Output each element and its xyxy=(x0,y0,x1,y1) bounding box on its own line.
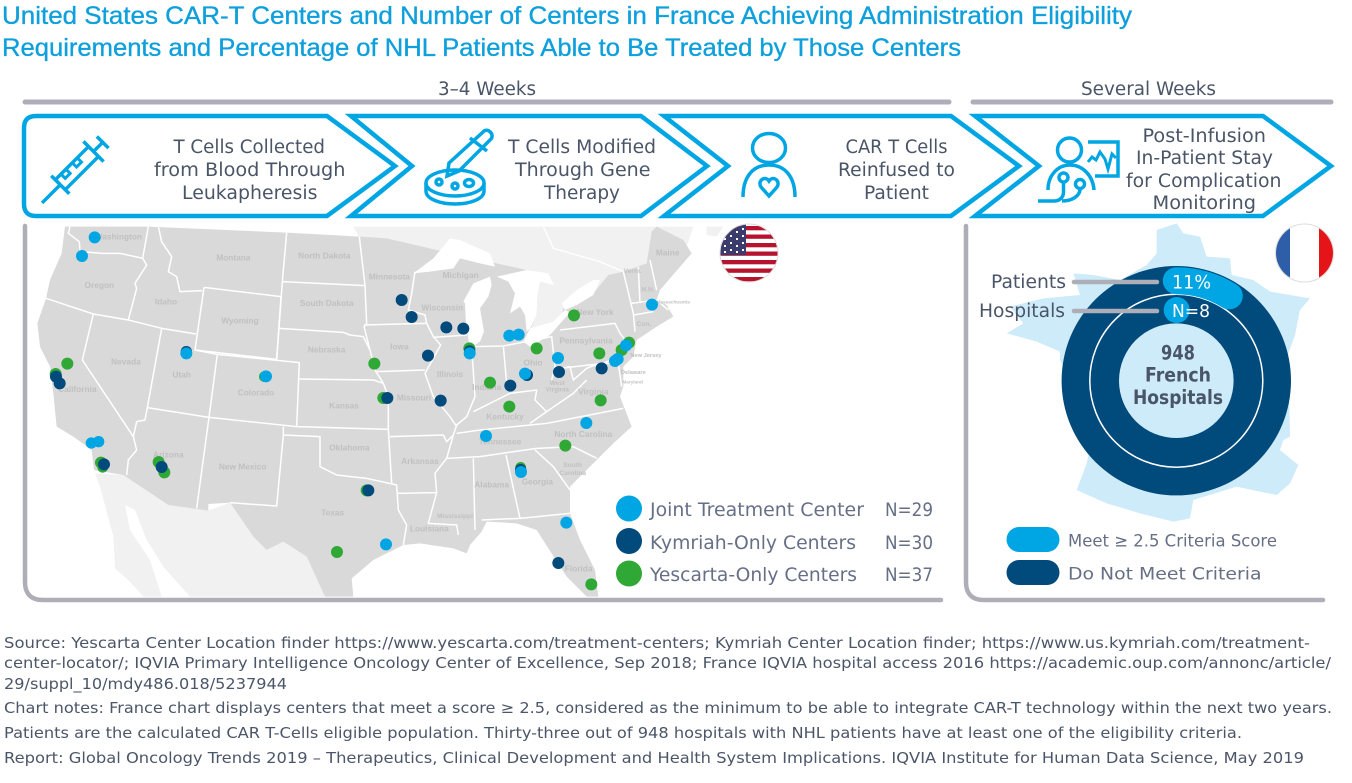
step 1 text: T Cells Collected xyxy=(173,137,325,158)
step 1 text: Leukapheresis xyxy=(182,183,318,204)
state labels: West xyxy=(550,380,566,387)
hospitals segment: N=8: N=8 xyxy=(1172,301,1210,322)
state labels: Ohio xyxy=(524,357,542,367)
step 1 text xyxy=(154,137,346,204)
source and chart notes: Source: Yescarta Center Location finder https://www.yescarta.com/treatment-centers; Kymriah Center Location finder; https://www.us.kymriah.com/treatment- xyxy=(4,634,1310,652)
step 4 text: Post-Infusion xyxy=(1142,126,1266,147)
state labels: Verm. xyxy=(624,268,642,275)
step 4 text: Monitoring xyxy=(1152,193,1256,214)
state labels: North Dakota xyxy=(298,250,351,260)
state labels: Minnesota xyxy=(369,272,410,282)
title: Requirements and Percentage of NHL Patients Able to Be Treated by Those Centers xyxy=(2,34,961,62)
center label: 948 xyxy=(1161,342,1195,364)
state labels: Carolina xyxy=(559,470,586,477)
legend: US centers: Joint Treatment Center xyxy=(649,499,864,521)
legend: US centers: Yescarta-Only Centers xyxy=(649,564,857,586)
center dots xyxy=(50,231,658,590)
center label: French xyxy=(1145,364,1211,386)
state labels: Mississippi xyxy=(437,513,473,520)
step 3 text: CAR T Cells xyxy=(846,137,948,158)
callout: patients: Patients xyxy=(991,272,1066,293)
legend: US centers xyxy=(616,496,933,586)
step 3 text: Patient xyxy=(864,183,929,204)
state labels: Arkansas xyxy=(401,456,439,466)
source and chart notes xyxy=(4,634,1332,767)
Kymriah-only dots xyxy=(50,294,608,569)
step 2 text xyxy=(507,137,656,204)
legend: US centers: Kymriah-Only Centers xyxy=(650,532,856,554)
state labels: South xyxy=(563,462,582,469)
state labels: North Carolina xyxy=(554,429,613,439)
state labels: Colorado xyxy=(238,388,274,398)
state labels: Con. xyxy=(637,321,652,328)
center label: Hospitals xyxy=(1133,386,1223,409)
step 4 text xyxy=(1126,126,1282,214)
state labels: Montana xyxy=(216,253,251,263)
state labels: Washington xyxy=(95,231,142,241)
step 2 text: Through Gene xyxy=(514,160,650,181)
state labels xyxy=(58,231,690,573)
state labels: Maine xyxy=(656,248,680,258)
legend: France criteria xyxy=(1006,527,1277,585)
source and chart notes: center-locator/; IQVIA Primary Intelligence Oncology Center of Excellence, Sep 2018; France IQVIA hospital access 2016 https://academic.oup.com/annonc/article/ xyxy=(4,654,1332,672)
state labels: Indiana xyxy=(472,382,502,392)
state labels: Delaware xyxy=(621,370,646,376)
state labels: Utah xyxy=(172,370,191,380)
icon: France flag xyxy=(1275,224,1334,282)
step 3: CAR T cells reinfused xyxy=(664,116,1019,216)
timeline bar: several weeks: Several Weeks xyxy=(1081,79,1216,100)
state labels: Arizona xyxy=(153,449,184,459)
step 1: T cells collected xyxy=(24,116,395,216)
joint treatment center dots xyxy=(76,231,658,550)
icon: patient with stethoscope and monitor xyxy=(1038,138,1118,201)
state labels: Idaho xyxy=(155,297,177,307)
source and chart notes: Report: Global Oncology Trends 2019 – Therapeutics, Clinical Development and Health System Implications. IQVIA Institute for Human Data Science, May 2019 xyxy=(4,749,1304,767)
state labels: Pennsylvania xyxy=(559,335,613,345)
state labels: Iowa xyxy=(390,341,409,351)
title xyxy=(2,2,1133,62)
title: United States CAR-T Centers and Number of Centers in France Achieving Administration Eligibility xyxy=(2,2,1133,30)
step 2 text: Therapy xyxy=(543,183,620,204)
state labels: Massachusetts xyxy=(657,300,690,305)
state labels: South Dakota xyxy=(300,298,354,308)
source and chart notes: Patients are the calculated CAR T-Cells eligible population. Thirty-three out of 948 hospitals with NHL patients have at least one of the eligibility criteria. xyxy=(4,724,1242,742)
center label xyxy=(1133,342,1223,409)
state labels: Virginia xyxy=(578,386,609,396)
Yescarta-only dots xyxy=(50,309,635,590)
state labels: Georgia xyxy=(522,476,553,486)
hospitals segment: N=8 xyxy=(1164,297,1210,323)
state labels: Oregon xyxy=(85,280,114,290)
state labels: California xyxy=(58,384,97,394)
state labels: Texas xyxy=(321,508,345,518)
state labels: Wyoming xyxy=(221,315,259,325)
state labels: Missouri xyxy=(397,393,431,403)
legend: US centers: N=29 xyxy=(885,499,933,521)
icon: US flag xyxy=(720,224,778,282)
state labels: New Jersey xyxy=(630,353,662,359)
state labels: New York xyxy=(576,307,614,317)
legend: US centers: N=30 xyxy=(885,532,933,554)
step 2 text: T Cells Modified xyxy=(507,137,656,158)
step 4 text: In-Patient Stay xyxy=(1136,148,1273,169)
state labels: Tennessee xyxy=(479,437,522,447)
source and chart notes: 29/suppl_10/mdy486.018/5237944 xyxy=(4,675,287,694)
panel: US map xyxy=(25,224,941,600)
state labels: N.H. xyxy=(641,287,655,294)
state labels: Michigan xyxy=(443,270,479,280)
icon: patient with heart xyxy=(743,134,795,197)
patients segment: 11%: 11% xyxy=(1172,272,1211,294)
state labels: Kentucky xyxy=(486,412,524,422)
state labels: Nebraska xyxy=(308,345,346,355)
state labels: Nevada xyxy=(111,357,141,367)
state labels: Wisconsin xyxy=(422,303,463,313)
panel: France xyxy=(966,223,1334,600)
callout: hospitals: Hospitals xyxy=(979,301,1065,322)
patients segment: 11% xyxy=(1172,272,1229,296)
icon: petri dish and dropper xyxy=(426,130,492,204)
icon: syringe xyxy=(34,133,112,211)
state labels: Illinois xyxy=(437,369,464,379)
legend: US centers: N=37 xyxy=(885,564,933,586)
legend: France criteria: Meet ≥ 2.5 Criteria Score xyxy=(1068,532,1277,552)
state labels: Virginia xyxy=(546,387,569,394)
step 3 text xyxy=(838,137,955,204)
source and chart notes: Chart notes: France chart displays centers that meet a score ≥ 2.5, considered as the minimum to be able to integrate CAR-T technology within the next two years. xyxy=(4,699,1332,717)
state labels: Maryland xyxy=(622,380,643,385)
donut chart: patients and hospitals xyxy=(1062,266,1291,495)
timeline bar: 3–4 weeks: 3–4 Weeks xyxy=(438,79,536,100)
legend: France criteria: Do Not Meet Criteria xyxy=(1068,564,1262,584)
state labels: Louisiana xyxy=(410,524,449,534)
state labels: New Mexico xyxy=(219,461,267,471)
state labels: Alabama xyxy=(474,479,509,489)
step 2: T cells modified xyxy=(351,116,707,216)
step 3 text: Reinfused to xyxy=(838,160,955,181)
state labels: Florida xyxy=(565,563,593,573)
step 4 text: for Complication xyxy=(1126,171,1282,192)
step 1 text: from Blood Through xyxy=(154,160,346,181)
step 4: post-infusion in-patient stay xyxy=(975,116,1331,216)
state labels: Oklahoma xyxy=(329,442,370,452)
state labels: Kansas xyxy=(329,400,359,410)
France map silhouette xyxy=(1007,223,1310,522)
US map with states xyxy=(37,227,723,597)
